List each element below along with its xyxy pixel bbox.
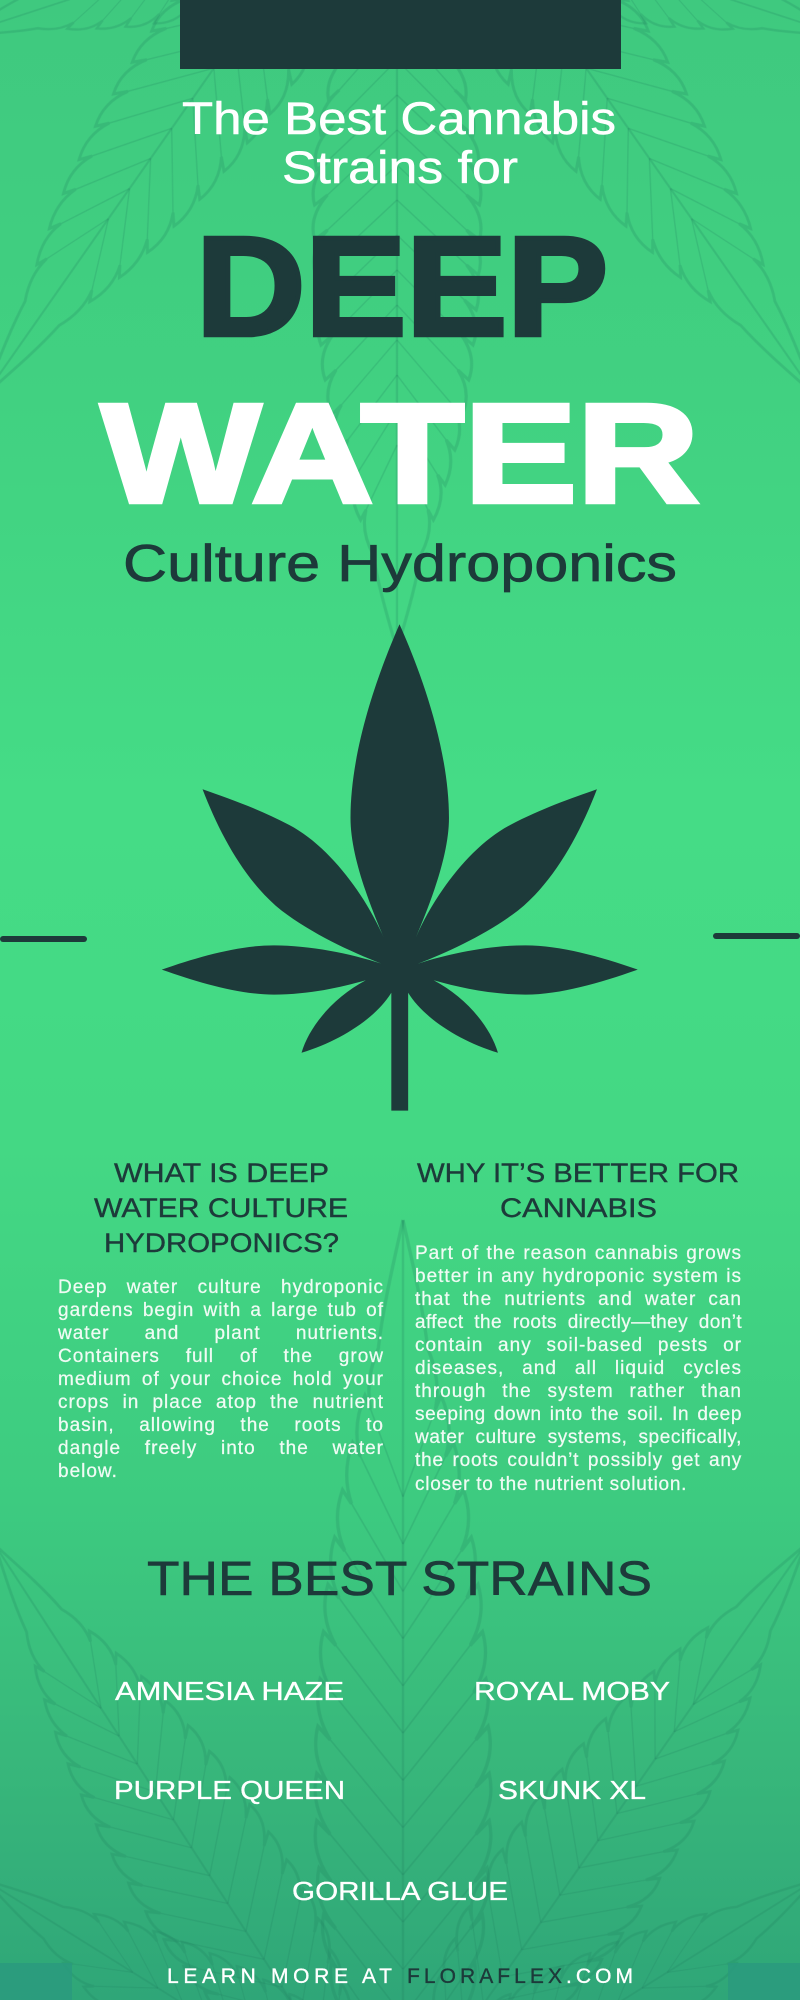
- footer call to action: [167, 1965, 633, 1988]
- footer call to action: LEARN MORE AT: [167, 1965, 392, 1988]
- text block: why it's better for cannabis: the roots couldn’t possibly get any: [415, 1450, 742, 1471]
- text block: why it's better for cannabis: better in any hydroponic system is: [415, 1266, 742, 1287]
- text block: why it's better for cannabis: Part of the reason cannabis grows: [415, 1243, 742, 1264]
- text block: what is deep water culture: [58, 1277, 384, 1482]
- title line: Culture Hydroponics: Culture Hydroponics: [123, 535, 677, 593]
- title line: The Best Cannabis: The Best Cannabis: [182, 93, 616, 144]
- footer corner block left: [0, 1963, 72, 2000]
- strain: Royal Moby: ROYAL MOBY: [474, 1676, 670, 1706]
- text block: what is deep water culture: Containers full of the grow: [58, 1346, 384, 1367]
- heading: what is deep water culture hydroponics: WHAT IS DEEP: [114, 1158, 329, 1188]
- footer call to action: FLORAFLEX: [407, 1965, 562, 1988]
- strain: Amnesia Haze: AMNESIA HAZE: [115, 1676, 344, 1706]
- text block: what is deep water culture: Deep water culture hydroponic: [58, 1277, 384, 1298]
- top dark banner: [180, 0, 621, 69]
- heading: what is deep water culture hydroponics: HYDROPONICS?: [104, 1228, 339, 1258]
- heading: why it's better for cannabis: [417, 1158, 739, 1223]
- text block: what is deep water culture: water and plant nutrients.: [58, 1323, 384, 1344]
- text block: why it's better for cannabis: through the system rather than: [415, 1381, 742, 1402]
- text block: what is deep water culture: crops in place atop the nutrient: [58, 1392, 384, 1413]
- heading: why it's better for cannabis: CANNABIS: [500, 1193, 657, 1223]
- text block: why it's better for cannabis: that the nutrients and water can: [415, 1289, 742, 1310]
- icon: cannabis leaf: [162, 624, 638, 1111]
- heading: why it's better for cannabis: WHY IT’S BETTER FOR: [417, 1158, 739, 1188]
- footer call to action: .COM: [566, 1965, 633, 1988]
- strain names: [114, 1676, 670, 1906]
- text block: what is deep water culture: gardens begin with a large tub of: [58, 1300, 384, 1321]
- strain: Skunk XL: SKUNK XL: [498, 1775, 646, 1805]
- strain: Gorilla Glue: GORILLA GLUE: [292, 1876, 508, 1906]
- title line: Strains for: Strains for: [282, 142, 518, 193]
- heading: what is deep water culture hydroponics: [94, 1158, 348, 1258]
- footer corner block right: [728, 1963, 800, 2000]
- text block: why it's better for cannabis: diseases, and all liquid cycles: [415, 1358, 742, 1379]
- text block: why it's better for cannabis: [415, 1243, 742, 1495]
- text block: why it's better for cannabis: closer to the nutrient solution.: [415, 1474, 687, 1495]
- text block: what is deep water culture: below.: [58, 1461, 118, 1482]
- strain: Purple Queen: PURPLE QUEEN: [114, 1775, 345, 1805]
- text block: what is deep water culture: medium of your choice hold your: [58, 1369, 384, 1390]
- right dash: [713, 933, 800, 939]
- heading: what is deep water culture hydroponics: WATER CULTURE: [94, 1193, 348, 1223]
- title line: WATER: WATER: [101, 374, 699, 532]
- title: [101, 93, 699, 593]
- left dash: [0, 936, 87, 942]
- text block: why it's better for cannabis: water culture systems, specifically,: [415, 1427, 742, 1448]
- text block: why it's better for cannabis: seeping down into the soil. In deep: [415, 1404, 742, 1425]
- text block: why it's better for cannabis: contain any soil-based pests or: [415, 1335, 742, 1356]
- title line: DEEP: DEEP: [196, 207, 608, 365]
- text block: what is deep water culture: basin, allowing the roots to: [58, 1415, 384, 1436]
- heading: the best strains: THE BEST STRAINS: [147, 1553, 652, 1606]
- text block: why it's better for cannabis: affect the roots directly—they don’t: [415, 1312, 742, 1333]
- text block: what is deep water culture: dangle freely into the water: [58, 1438, 384, 1459]
